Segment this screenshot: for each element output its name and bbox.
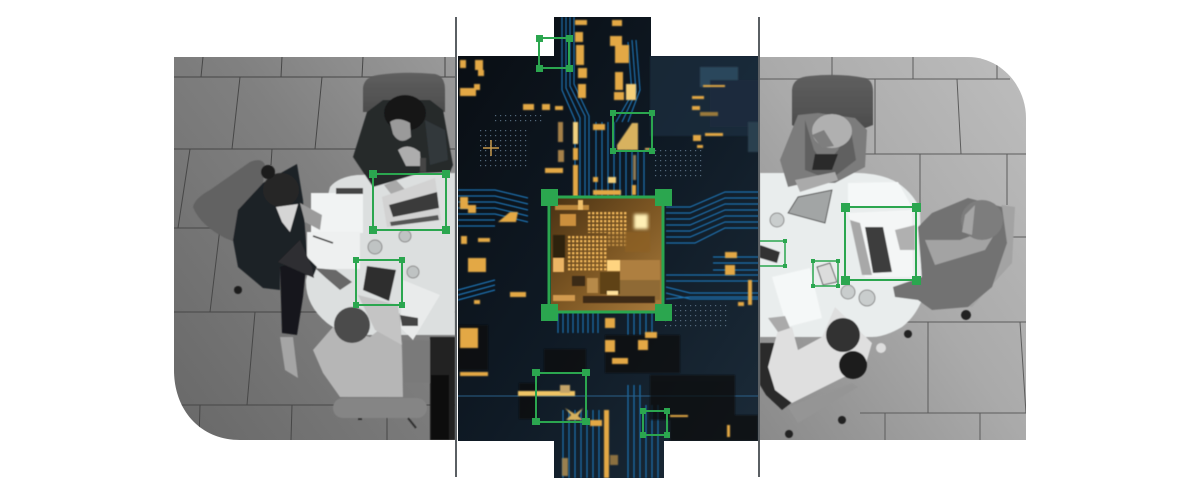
woman in dark suit bbox=[193, 160, 352, 378]
gold circuit highlights bbox=[460, 20, 752, 478]
panel: left meeting photo bbox=[174, 57, 455, 440]
dark grid blocks bbox=[458, 325, 758, 441]
man at right bbox=[893, 198, 1015, 310]
papers bbox=[772, 182, 912, 327]
traces: blue vertical top bbox=[458, 17, 759, 478]
infographic composite bbox=[174, 17, 1026, 478]
frame: laptop left bbox=[369, 170, 450, 234]
laptop bbox=[848, 210, 913, 277]
frame: circuit upper bbox=[610, 110, 655, 154]
block: upper right bbox=[650, 56, 759, 152]
woman in white blouse bbox=[760, 308, 872, 410]
panel: right meeting photo bbox=[760, 57, 1026, 440]
horizontal trace bbox=[458, 396, 758, 397]
frame: circuit lower bbox=[532, 369, 590, 425]
frame: circuit top bbox=[536, 35, 573, 72]
tablet on table bbox=[788, 190, 832, 223]
frame: chip bbox=[541, 189, 672, 321]
icon: gold cross bbox=[483, 140, 499, 156]
processor chip bbox=[551, 198, 662, 311]
frame: tablet left bbox=[353, 257, 405, 308]
divider lines bbox=[455, 17, 760, 477]
woman in grey jacket bbox=[780, 113, 867, 192]
frame: circuit bottom right bbox=[640, 408, 670, 438]
bright die hotspot bbox=[634, 214, 648, 229]
glasses bbox=[368, 230, 419, 278]
documents bbox=[307, 188, 363, 269]
phones bbox=[760, 245, 837, 285]
frame: phone right bbox=[811, 259, 840, 288]
tablet and paper bbox=[363, 266, 440, 340]
panel: circuit board bbox=[458, 17, 759, 478]
man in light jacket bbox=[313, 295, 455, 440]
dotted pads bbox=[478, 112, 727, 330]
glasses bbox=[770, 213, 875, 306]
laptop bbox=[382, 178, 441, 227]
icon: top chair bbox=[363, 73, 445, 112]
man in dark suit bbox=[352, 94, 454, 194]
selection frames bbox=[353, 35, 921, 438]
round table bbox=[760, 173, 922, 337]
top chair bbox=[792, 75, 873, 130]
chair wheels and base bbox=[785, 310, 971, 438]
round table bbox=[306, 173, 455, 335]
frame: phone at table edge bbox=[760, 239, 787, 268]
frame: laptop right bbox=[841, 203, 921, 285]
